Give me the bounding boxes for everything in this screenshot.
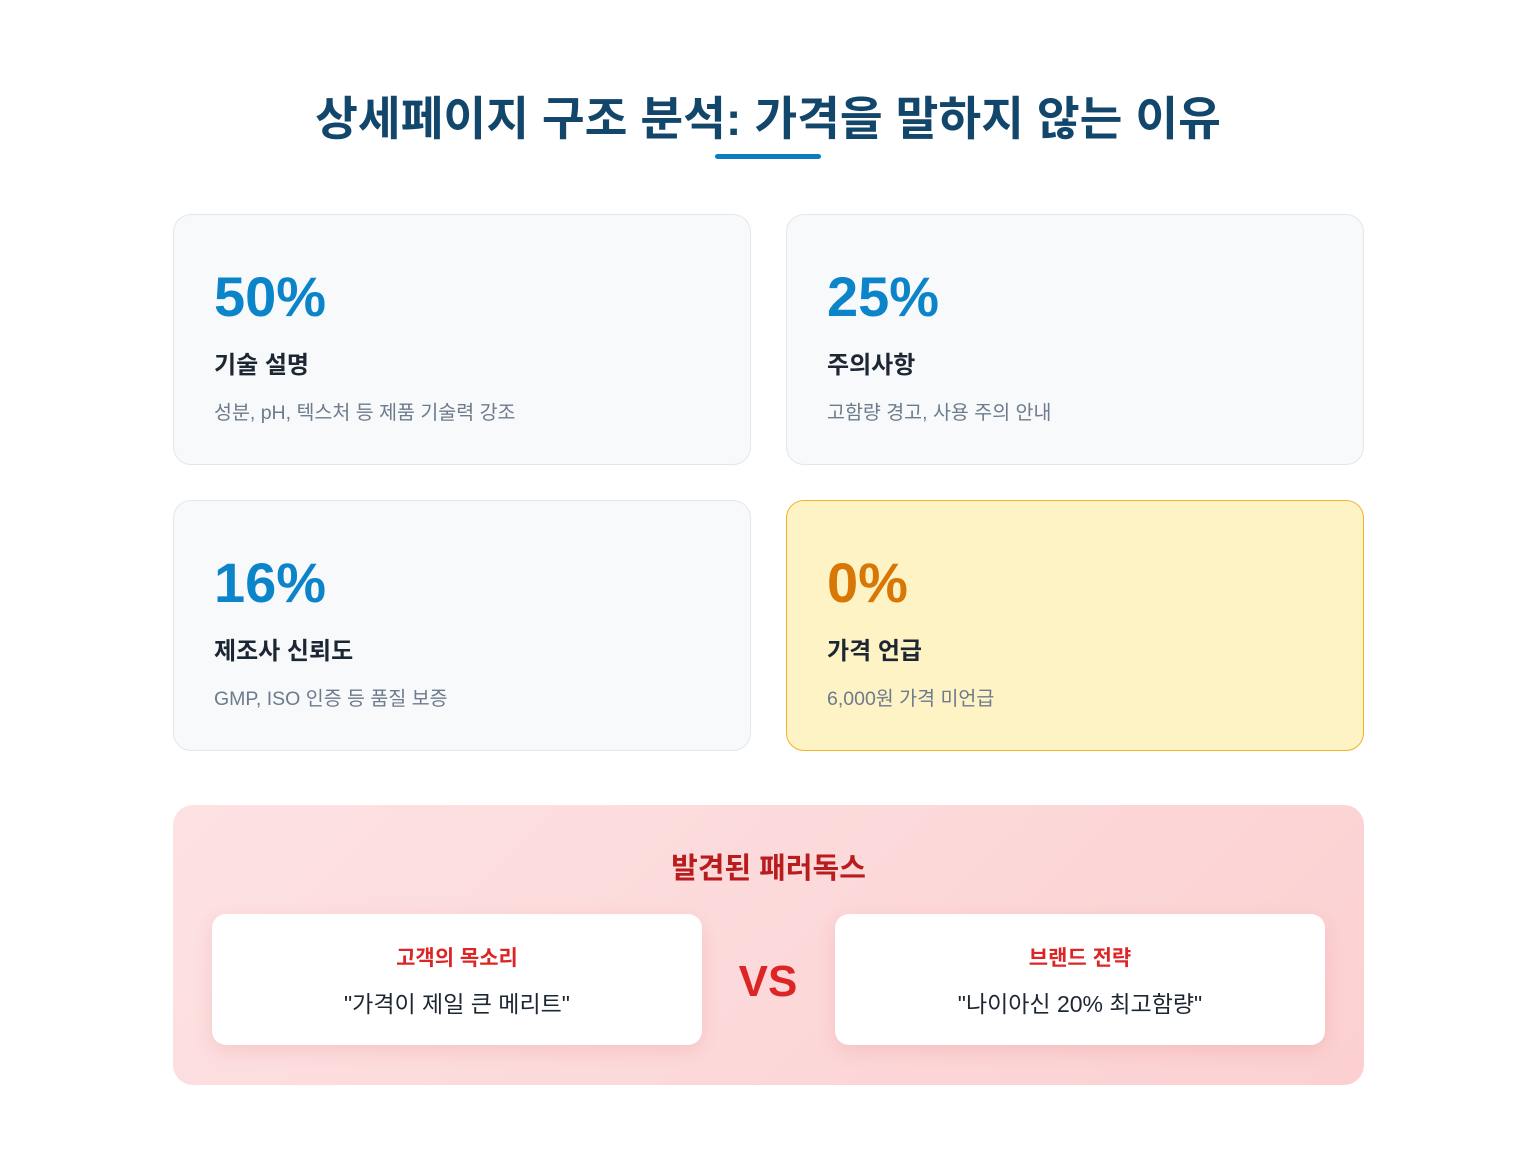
quote: "나이아신 20% 최고함량" [958, 991, 1202, 1017]
card: price (highlight) [786, 500, 1364, 751]
heading: 가격 언급 [827, 638, 922, 665]
heading: 제조사 신뢰도 [214, 638, 353, 665]
description: GMP, ISO 인증 등 품질 보증 [214, 688, 448, 710]
description: 고함량 경고, 사용 주의 안내 [827, 402, 1051, 424]
paradox heading: 발견된 패러독스 [671, 853, 866, 885]
label: 고객의 목소리 [396, 947, 518, 970]
label: 브랜드 전략 [1029, 947, 1131, 970]
description: 6,000원 가격 미언급 [827, 688, 994, 710]
panel: paradox [173, 805, 1364, 1085]
stat 25%: 25% [827, 265, 939, 328]
stat 0%: 0% [827, 551, 908, 614]
title underline [715, 154, 821, 159]
card: technical [173, 214, 751, 465]
description: 성분, pH, 텍스처 등 제품 기술력 강조 [214, 402, 516, 424]
card: manufacturer [173, 500, 751, 751]
vs label: VS [739, 957, 797, 1006]
stat 50%: 50% [214, 265, 326, 328]
heading: 주의사항 [827, 352, 915, 379]
stat 16%: 16% [214, 551, 326, 614]
card: cautions [786, 214, 1364, 465]
card: customer voice [212, 914, 702, 1045]
heading: 기술 설명 [214, 352, 309, 379]
title: 상세페이지 구조 분석: 가격을 말하지 않는 이유 [315, 93, 1221, 145]
card: brand strategy [835, 914, 1325, 1045]
quote: "가격이 제일 큰 메리트" [344, 991, 570, 1017]
